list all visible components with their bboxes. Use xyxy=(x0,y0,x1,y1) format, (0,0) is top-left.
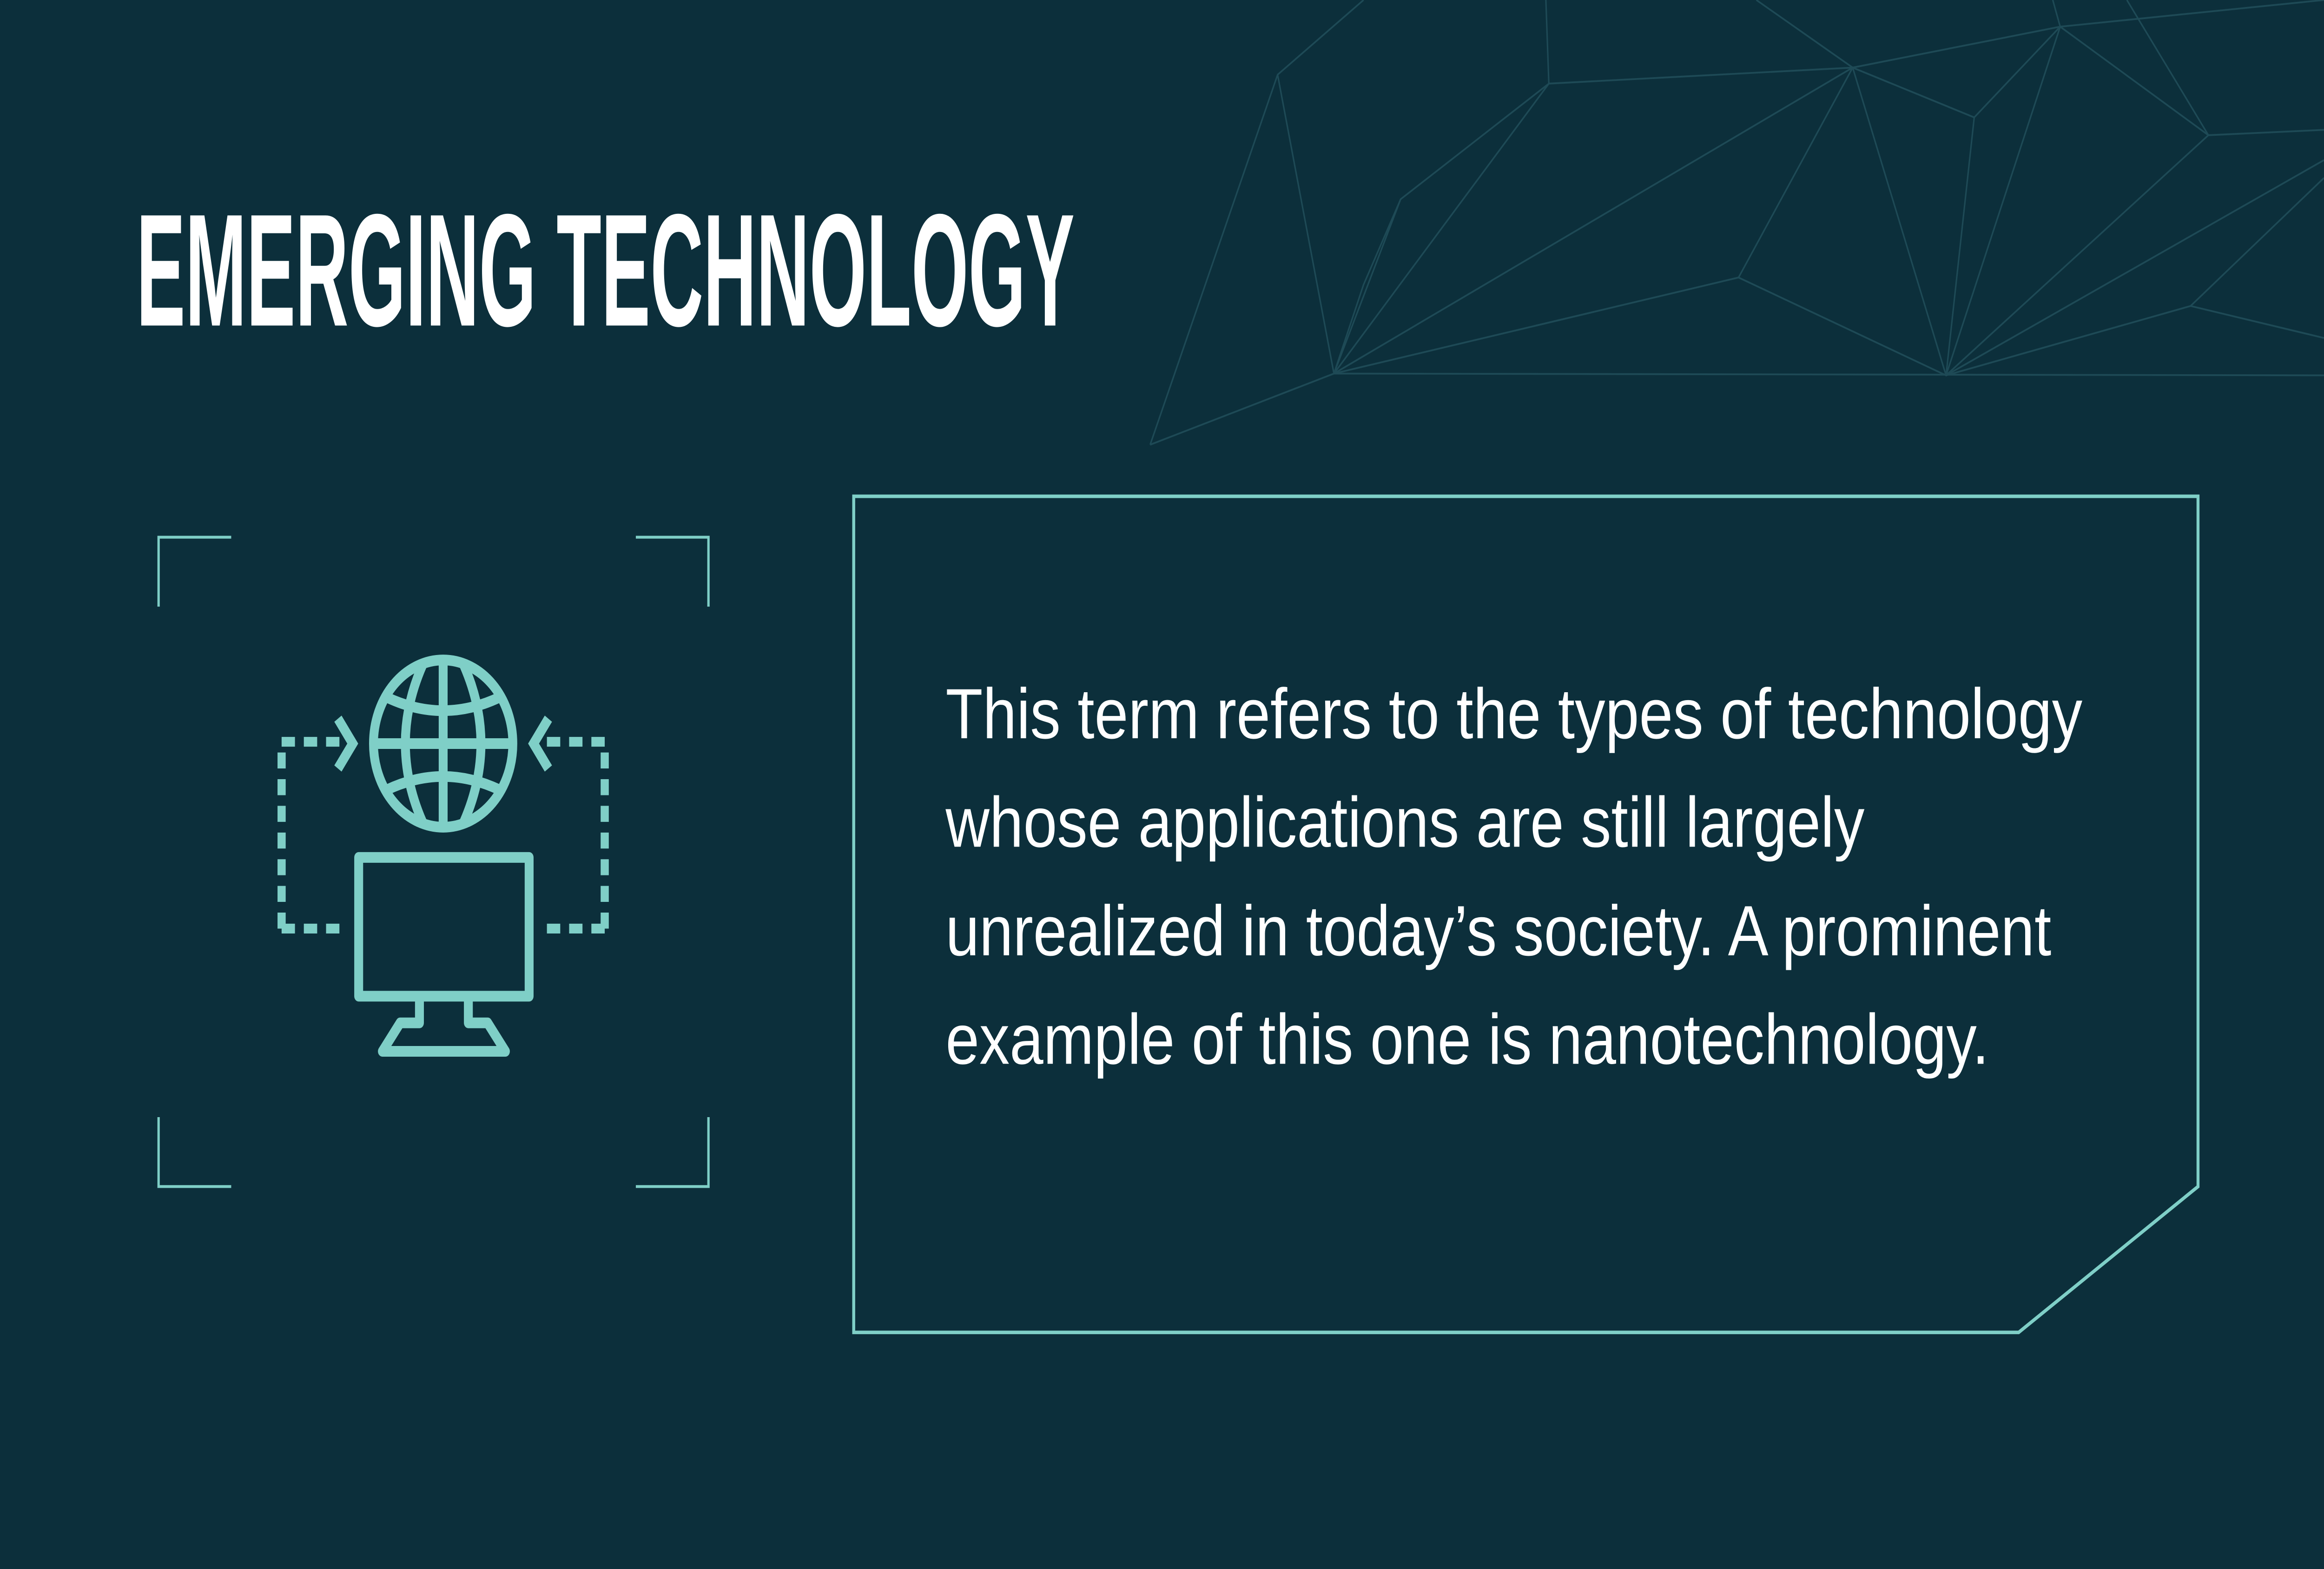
icon: globe and monitor exchange xyxy=(282,660,605,1051)
title: EMERGING TECHNOLOGY xyxy=(136,181,1075,360)
panel: description box xyxy=(854,497,2198,1332)
arrow: left dotted xyxy=(282,719,353,928)
icon: monitor xyxy=(359,857,529,1051)
text block: description: This term refers to the types of technology xyxy=(945,674,2083,754)
icon: globe xyxy=(374,660,513,827)
text block: description xyxy=(945,674,2083,1079)
text block: description: example of this one is nanotechnology. xyxy=(945,999,1989,1079)
icon frame: corner brackets xyxy=(158,537,708,1186)
arrow: right dotted xyxy=(534,719,605,928)
text block: description: unrealized in today’s society. A prominent xyxy=(945,891,2051,970)
text block: description: whose applications are still largely xyxy=(945,782,1865,862)
